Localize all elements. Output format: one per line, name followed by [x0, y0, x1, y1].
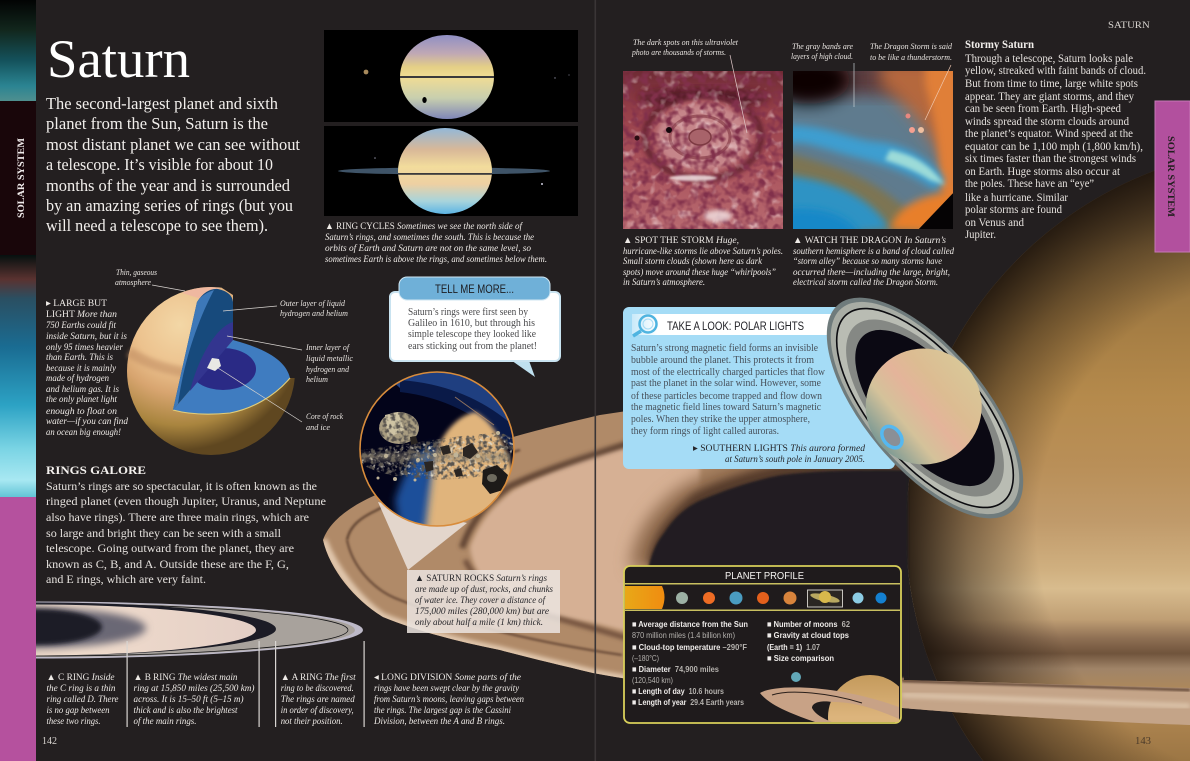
body text: winds spread the storm clouds around	[965, 116, 1129, 128]
caption: A ring: ring to be discovered.	[281, 684, 354, 694]
dark gap between rings and planet	[640, 470, 908, 678]
caption: ring cycles: orbits of Earth and Saturn are not on the same level, so	[325, 243, 531, 254]
stats right column: ■ Size comparison	[767, 653, 834, 663]
stats right column: ■ Number of moons 62	[767, 619, 850, 629]
right side tab: SOLAR SYSTEM	[1165, 136, 1175, 217]
panel body: the magnetic field lines toward Saturn’s magnetic	[631, 402, 822, 413]
caption: long division: Division, between the A and B rings.	[373, 717, 505, 727]
caption: large but light: made of hydrogen	[46, 373, 109, 384]
body text: equator can be 1,100 mph (1,800 km/h),	[965, 141, 1143, 153]
right side tab	[1155, 101, 1190, 252]
body text	[965, 53, 1146, 241]
panel body: past the planet in the solar wind. However, some	[631, 378, 822, 389]
body text: and E rings, which are very faint.	[46, 574, 206, 586]
caption: large but light: ▸ LARGE BUT	[46, 299, 107, 309]
panel body: of these particles become trapped and flow down	[631, 391, 822, 402]
body text: the poles. These have an “eye”	[965, 178, 1094, 190]
caption: large but light: LIGHT More than	[46, 310, 117, 320]
caption: watch the dragon: “storm alley” because so many storms have	[793, 257, 942, 267]
intro paragraph: by an amazing series of rings (but you	[46, 196, 293, 215]
caption: large but light: because it is mainly	[46, 364, 117, 374]
diagram labels: Inner layer of	[305, 342, 350, 352]
caption: B ring	[134, 673, 254, 727]
diagram labels: liquid metallic	[306, 353, 353, 363]
pointer from rocks photo to caption	[378, 502, 467, 570]
giant planet body	[900, 140, 1190, 761]
intro paragraph: The second-largest planet and sixth	[46, 94, 278, 113]
body text: Saturn’s rings are so spectacular, it is often known as the	[46, 481, 317, 493]
leader lines	[152, 285, 302, 422]
body text: ringed planet (even though Jupiter, Uranus, and Neptune	[46, 496, 326, 508]
storm photo annotations: The gray bands are	[792, 41, 853, 51]
header pill	[399, 277, 550, 300]
callout text: Galileo in 1610, but through his	[408, 318, 535, 329]
body text: known as C, B, and A. Outside these are the F, G,	[46, 559, 289, 571]
caption: spot the storm: ▲ SPOT THE STORM Huge,	[623, 236, 739, 246]
caption: saturn rocks: only about half a mile (1 km) thick.	[415, 617, 543, 628]
stats right column	[767, 619, 850, 663]
intro paragraph	[46, 94, 300, 235]
caption: B ring: of the main rings.	[134, 716, 196, 727]
caption: spot the storm: in Saturn’s atmosphere.	[623, 278, 705, 288]
caption: large but light: the only planet light	[46, 395, 117, 405]
body text: yellow, streaked with faint bands of cloud.	[965, 65, 1146, 77]
panel body: poles. When they strike the upper atmosphere,	[631, 414, 810, 425]
stats left column	[632, 619, 748, 707]
diagram labels: hydrogen and helium	[280, 308, 348, 318]
panel body: they form rings of light called auroras.	[631, 426, 779, 437]
body text	[46, 481, 326, 586]
storm photo annotations: The dark spots on this ultraviolet	[633, 37, 739, 47]
storm photo annotations: layers of high cloud.	[791, 51, 853, 61]
photo: Saturn with aurora	[792, 266, 1058, 550]
caption: spot the storm	[623, 236, 783, 288]
stats left column: (–180°C)	[632, 653, 659, 663]
spine line	[594, 0, 596, 761]
callout text: simple telescope they looked like	[408, 329, 537, 340]
caption: A ring: in order of discovery,	[281, 705, 354, 716]
caption: long division: rings have been swept clear by the gravity	[374, 684, 520, 694]
body text: telescope. Going outward from the planet, they are	[46, 543, 294, 555]
heading: PLANET PROFILE	[725, 570, 804, 582]
caption: B ring: ring at 15,850 miles (25,500 km)	[134, 683, 254, 694]
page number 143: 143	[1135, 736, 1151, 747]
header band	[632, 314, 842, 335]
body text: can be seen from Earth. High-speed	[965, 103, 1121, 115]
planet lineup	[625, 586, 886, 609]
caption: large but light	[46, 299, 128, 438]
side label: SOLAR SYSTEM	[17, 138, 27, 218]
storm photo annotations: The Dragon Storm is said	[870, 41, 953, 51]
panel: planet profile	[623, 565, 902, 724]
diagram labels	[115, 267, 353, 432]
giant ring system	[320, 395, 1190, 735]
diagram: Saturn cutaway	[127, 270, 305, 455]
caption: A ring: ▲ A RING The first	[281, 672, 356, 683]
caption: spot the storm: Small storm clouds (shown here as dark	[623, 256, 763, 267]
caption: C ring: these two rings.	[46, 717, 100, 727]
storm photo annotations: photo are thousands of storms.	[631, 47, 726, 57]
background image: giant Saturn and rings	[320, 140, 1190, 761]
diagram labels: hydrogen and	[306, 364, 350, 374]
panel body	[631, 343, 826, 437]
caption: spot the storm: hurricane-like storms lie above Saturn’s poles.	[623, 247, 783, 257]
caption: C ring: the C ring is a thin	[46, 684, 116, 694]
icon: magnifying glass	[633, 316, 656, 336]
photo: ring close-up strip	[0, 595, 363, 665]
title: Saturn	[47, 29, 190, 89]
body text: Through a telescope, Saturn looks pale	[965, 53, 1133, 65]
caption: saturn rocks: of water ice. They cover a distance of	[415, 595, 546, 606]
storm photo annotations: to be like a thunderstorm.	[870, 52, 952, 62]
caption: watch the dragon	[793, 236, 954, 288]
caption: large but light: 750 Earths could fit	[46, 320, 116, 331]
caption: C ring	[46, 673, 118, 727]
body text: appear. They are giant storms, and they	[965, 91, 1134, 103]
callout text: Saturn’s rings were first seen by	[408, 307, 528, 318]
caption: long division: the rings. The largest gap is the Cassini	[374, 706, 511, 716]
horizontal face	[173, 340, 290, 414]
caption: large but light: than Earth. This is	[46, 353, 113, 363]
diagram labels: Core of rock	[306, 411, 343, 421]
stats right column: ■ Gravity at cloud tops	[767, 630, 849, 640]
caption: long division	[373, 672, 524, 727]
caption: ring cycles: Saturn’s rings, and sometimes the south. This is because the	[325, 233, 534, 243]
caption: large but light: an ocean big enough!	[46, 428, 121, 438]
diagram labels: Outer layer of liquid	[280, 298, 346, 308]
body text: polar storms are found	[965, 204, 1062, 216]
heading: Stormy Saturn	[965, 39, 1035, 51]
section: stormy saturn	[965, 39, 1146, 241]
stats right column: (Earth = 1) 1.07	[767, 642, 820, 652]
caption: ring cycles	[325, 221, 547, 265]
panel body: Saturn’s strong magnetic field forms an invisible	[631, 343, 819, 354]
photo: dragon storm	[793, 71, 953, 229]
caption: saturn rocks	[407, 570, 560, 633]
caption: long division: ◂ LONG DIVISION Some parts of the	[374, 672, 521, 683]
caption: watch the dragon: ▲ WATCH THE DRAGON In Saturn’s	[793, 236, 946, 246]
intro paragraph: a telescope. It’s visible for about 10	[46, 155, 273, 174]
stats left column: ■ Average distance from the Sun	[632, 619, 748, 629]
caption: watch the dragon: occurred there—including the large, bright,	[793, 268, 950, 278]
section: rings galore	[46, 463, 326, 586]
caption: long division: from Saturn’s moons, leaving gaps between	[374, 694, 524, 705]
rock belt	[360, 434, 516, 478]
circular photo: saturn rocks	[358, 370, 520, 530]
photo: ring cycles	[324, 30, 578, 216]
body text: Jupiter.	[965, 229, 996, 241]
caption: A ring	[281, 672, 356, 727]
running head: SATURN	[1108, 21, 1150, 31]
body text: like a hurricane. Similar	[965, 192, 1068, 204]
callout text: ears sticking out from the planet!	[408, 341, 537, 352]
tell me more callout: TELL ME MORE...	[435, 282, 514, 296]
stats left column: 870 million miles (1.4 billion km)	[632, 630, 735, 640]
body text: the planet’s equator. Wind speed at the	[965, 128, 1133, 140]
storm photo annotations	[631, 37, 953, 133]
ring pointer lines	[126, 641, 365, 727]
core	[207, 358, 221, 371]
panel body: bubble around the planet. This protects it from	[631, 355, 814, 366]
intro paragraph: planet from the Sun, Saturn is the	[46, 114, 268, 133]
stats left column: ■ Cloud-top temperature –290°F	[632, 642, 747, 652]
panel caption: at Saturn’s south pole in January 2005.	[725, 455, 865, 465]
intro paragraph: will need a telescope to see them).	[46, 216, 268, 235]
caption: ring cycles: sometimes Earth is above the rings, and sometimes below them.	[325, 255, 547, 265]
caption: C ring: ring called D. There	[46, 695, 118, 705]
caption: C ring: is no gap between	[46, 706, 110, 716]
stats left column: ■ Length of year 29.4 Earth years	[632, 697, 744, 707]
diagram labels: and ice	[306, 422, 330, 432]
caption: B ring: across. It is 15–50 ft (5–15 m)	[134, 694, 244, 705]
tell me more callout	[390, 277, 560, 377]
stats left column: ■ Length of day 10.6 hours	[632, 686, 724, 696]
caption: B ring: thick and is also the brightest	[134, 706, 238, 716]
heading: RINGS GALORE	[46, 463, 146, 477]
aurora	[878, 422, 906, 452]
body text: on Earth. Huge storms also occur at	[965, 166, 1121, 178]
caption: A ring: not their position.	[281, 717, 343, 727]
body text: on Venus and	[965, 217, 1024, 229]
cut out wedge	[222, 270, 305, 378]
panel caption: ▸ SOUTHERN LIGHTS This aurora formed	[693, 443, 865, 454]
stats left column: (120,540 km)	[632, 675, 673, 685]
caption: spot the storm: spots) move around these huge “whirlpools”	[623, 267, 776, 278]
body text: six times faster than the strongest winds	[965, 153, 1136, 165]
intro paragraph: months of the year and is surrounded	[46, 176, 290, 195]
left side tab	[0, 0, 36, 761]
caption: B ring: ▲ B RING The widest main	[134, 673, 238, 683]
caption: saturn rocks: ▲ SATURN ROCKS Saturn’s rings	[415, 574, 547, 584]
top Saturn	[364, 35, 570, 119]
caption: saturn rocks: are made up of dust, rocks, and chunks	[415, 584, 553, 595]
caption: large but light: only 95 times heavier	[46, 343, 123, 353]
body text: also have rings). There are three main rings, which are	[46, 512, 309, 524]
caption: large but light: and helium gas. It is	[46, 385, 119, 395]
panel caption	[693, 443, 865, 465]
caption: watch the dragon: electrical storm called the Dragon Storm.	[793, 278, 938, 288]
diagram labels: helium	[306, 374, 328, 384]
callout text	[408, 307, 537, 352]
panel body: most of the electrically charged particles that flow	[631, 367, 826, 378]
caption: watch the dragon: southern hemisphere is a band of cloud called	[793, 246, 954, 257]
caption: saturn rocks: 175,000 miles (280,000 km) but are	[415, 606, 549, 617]
caption: A ring: The rings are named	[281, 695, 355, 705]
intro paragraph: most distant planet we can see without	[46, 135, 300, 154]
diagram labels: atmosphere	[115, 277, 151, 287]
caption: large but light: enough to float on	[46, 406, 117, 417]
stats left column: ■ Diameter 74,900 miles	[632, 664, 719, 674]
caption: large but light: water—if you can find	[46, 416, 128, 427]
bottom Saturn	[338, 128, 550, 214]
caption: ring cycles: ▲ RING CYCLES Sometimes we see the north side of	[325, 221, 523, 232]
photo: ultraviolet storm	[623, 71, 783, 229]
panel: take a look polar lights: TAKE A LOOK: POLAR LIGHTS	[667, 321, 804, 333]
body text: But from time to time, large white spots	[965, 78, 1138, 90]
tail	[508, 358, 535, 377]
planet	[842, 325, 1005, 488]
page number 142: 142	[42, 736, 57, 747]
panel: take a look polar lights	[623, 307, 895, 469]
body text: so large and bright they can be seen with a small	[46, 528, 281, 540]
caption: large but light: inside Saturn, but it is	[46, 332, 127, 342]
sphere shell	[127, 287, 295, 455]
diagram labels: Thin, gaseous	[116, 267, 158, 277]
size comparison	[760, 672, 899, 722]
wall	[173, 289, 233, 410]
caption: C ring: ▲ C RING Inside	[46, 673, 114, 683]
